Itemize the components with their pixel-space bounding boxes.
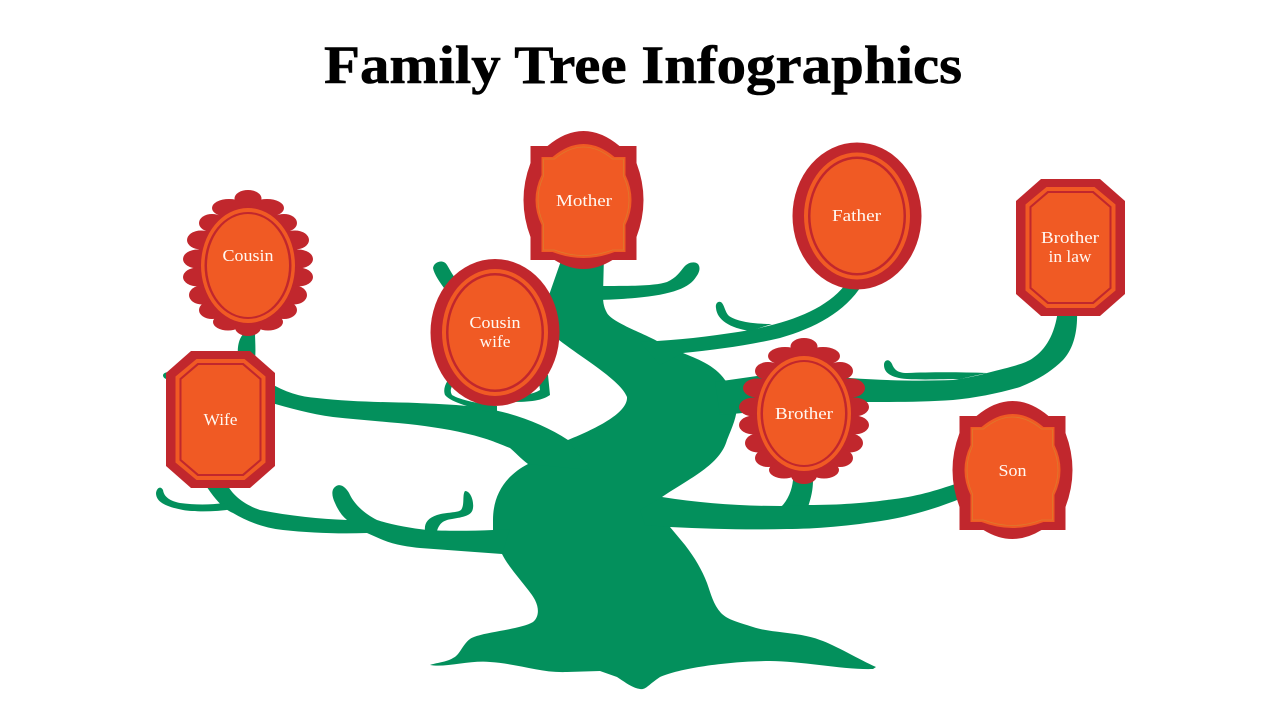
frame: mother <box>524 131 644 269</box>
tree <box>156 255 1077 689</box>
label: cousin wife: wife <box>480 332 510 351</box>
label: brother in law <box>1041 228 1099 266</box>
branch: father <box>640 285 862 365</box>
twig: brother in law branch <box>884 360 987 379</box>
label: cousin wife: Cousin <box>470 313 521 332</box>
twig: s-curve <box>425 491 473 531</box>
twig: cousin wife lower loop <box>444 375 550 414</box>
title: Family Tree Infographics <box>324 35 962 95</box>
trunk <box>430 255 876 689</box>
twig: wife left nub <box>163 372 172 379</box>
frame: wife <box>166 351 275 488</box>
label: cousin wife <box>470 313 521 351</box>
label: brother in law: in law <box>1048 247 1092 266</box>
label: brother: Brother <box>775 404 833 423</box>
twig: father branch <box>716 302 772 331</box>
stem: brother <box>781 480 813 507</box>
branch: wife <box>268 382 590 470</box>
frame: cousin <box>183 190 313 336</box>
twig: far left <box>156 488 233 511</box>
frame: cousin wife <box>430 259 560 406</box>
label: son: Son <box>998 461 1027 480</box>
frame: son <box>952 401 1072 539</box>
frame: brother in law <box>1016 179 1125 316</box>
branch: mother twig <box>600 262 699 300</box>
branch: lower left <box>205 484 510 554</box>
branch: son <box>640 483 962 529</box>
frame: brother <box>739 338 869 484</box>
label: cousin: Cousin <box>222 246 274 265</box>
label: father: Father <box>832 206 881 225</box>
label: wife: Wife <box>204 410 238 429</box>
twig: cousin wife top <box>433 261 458 292</box>
label: brother in law: Brother <box>1041 228 1099 247</box>
branch: brother in law <box>715 310 1077 415</box>
label: mother: Mother <box>556 191 612 210</box>
stem: cousin <box>238 332 255 360</box>
frame: father <box>792 142 922 290</box>
